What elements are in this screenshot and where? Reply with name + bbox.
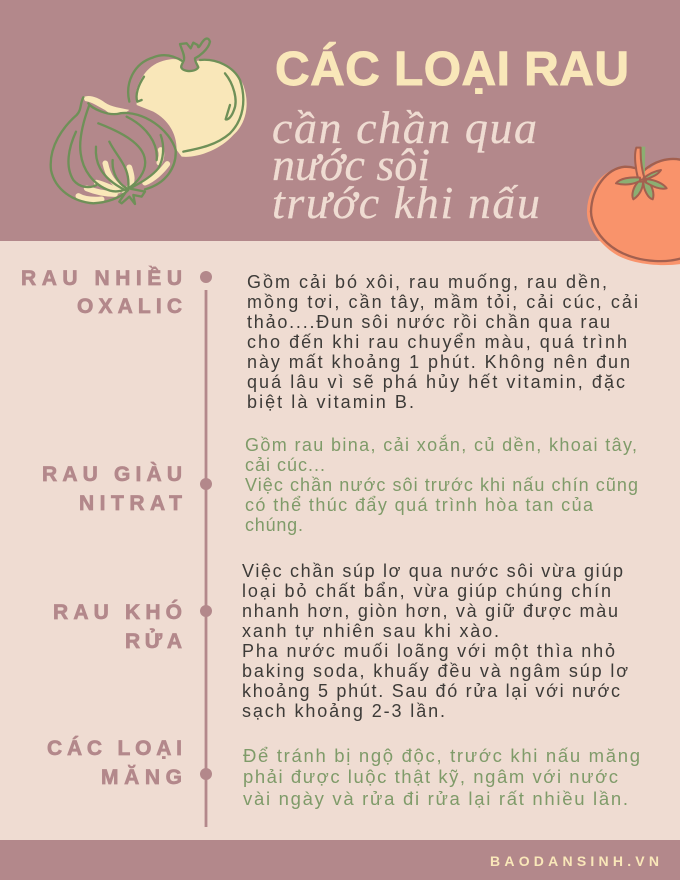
- text block: rau khó rửa: loại bỏ chất bẩn, vừa giúp chúng chín: [242, 581, 611, 601]
- icon: onions illustration: [51, 39, 247, 204]
- text block: rau khó rửa: baking soda, khuấy đều và ngâm súp lơ: [242, 661, 628, 681]
- heading: rau giàu nitrat: NITRAT: [79, 492, 182, 515]
- text block: các loại măng: vài ngày và rửa đi rửa lại rất nhiều lần.: [243, 788, 628, 809]
- text block: rau giàu nitrat: Gồm rau bina, cải xoắn, củ dền, khoai tây,: [245, 434, 637, 455]
- timeline: [200, 271, 212, 827]
- text block: rau khó rửa: khoảng 5 phút. Sau đó rửa lại với nước: [242, 681, 620, 701]
- icon: back onion: [128, 39, 247, 157]
- text block: rau giàu nitrat: Việc chần nước sôi trước khi nấu chín cũng: [245, 475, 638, 495]
- icon: tomato: [587, 147, 680, 265]
- text block: rau nhiều oxalic: cho đến khi rau chuyển màu, quá trình: [247, 332, 627, 352]
- text block: rau giàu nitrat: có thể thúc đẩy quá trình hòa tan của: [245, 495, 594, 515]
- text block: các loại măng: Để tránh bị ngộ độc, trước khi nấu măng: [243, 745, 640, 766]
- heading: các loại măng: MĂNG: [101, 766, 182, 789]
- subtitle: cần chần qua: [272, 102, 537, 153]
- title: CÁC LOẠI RAU: [275, 42, 629, 96]
- subtitle: nước sôi: [272, 139, 430, 190]
- text block: rau khó rửa: xanh tự nhiên sau khi xào.: [242, 621, 499, 641]
- footer band: [0, 840, 680, 880]
- text block: rau giàu nitrat: [245, 434, 638, 535]
- text block: rau khó rửa: [242, 561, 628, 721]
- text block: rau nhiều oxalic: biệt là vitamin B.: [247, 392, 414, 412]
- heading: rau giàu nitrat: [42, 463, 182, 515]
- text block: các loại măng: phải được luộc thật kỹ, ngâm với nước: [243, 766, 618, 787]
- text block: rau giàu nitrat: cải cúc...: [245, 455, 325, 475]
- text block: rau khó rửa: nhanh hơn, giòn hơn, và giữ được màu: [242, 601, 618, 621]
- timeline dot 1: [200, 271, 212, 283]
- heading: rau khó rửa: RỬA: [125, 629, 182, 653]
- text block: rau nhiều oxalic: Gồm cải bó xôi, rau muống, rau dền,: [247, 272, 607, 292]
- header band: [0, 0, 680, 241]
- timeline dot 4: [200, 768, 212, 780]
- text block: rau nhiều oxalic: [247, 272, 638, 412]
- heading: các loại măng: [47, 737, 182, 789]
- heading: rau nhiều oxalic: [21, 267, 182, 318]
- text block: rau khó rửa: Pha nước muối loãng với một thìa nhỏ: [242, 641, 615, 661]
- heading: rau khó rửa: [53, 600, 182, 653]
- icon: front onion: [51, 95, 176, 204]
- heading: rau khó rửa: RAU KHÓ: [53, 600, 182, 624]
- text block: rau nhiều oxalic: mồng tơi, cần tây, mầm tỏi, cải cúc, cải: [247, 292, 638, 312]
- subtitle: trước khi nấu: [272, 177, 540, 228]
- timeline dot 2: [200, 478, 212, 490]
- text block: rau khó rửa: Việc chần súp lơ qua nước sôi vừa giúp: [242, 561, 623, 581]
- text block: rau khó rửa: sạch khoảng 2-3 lần.: [242, 701, 445, 721]
- text block: rau nhiều oxalic: thảo....Đun sôi nước rồi chần qua rau: [247, 312, 610, 332]
- subtitle: [272, 102, 540, 228]
- timeline dot 3: [200, 605, 212, 617]
- text block: rau nhiều oxalic: quá lâu vì sẽ phá hủy hết vitamin, đặc: [247, 372, 625, 392]
- text block: các loại măng: [243, 745, 640, 809]
- footer source text: BAODANSINH.VN: [490, 853, 659, 869]
- text block: rau nhiều oxalic: này mất khoảng 1 phút. Không nên đun: [247, 352, 630, 372]
- heading: rau giàu nitrat: RAU GIÀU: [42, 463, 182, 486]
- heading: rau nhiều oxalic: OXALIC: [77, 295, 182, 318]
- text block: rau giàu nitrat: chúng.: [245, 515, 303, 535]
- heading: rau nhiều oxalic: RAU NHIỀU: [21, 267, 182, 290]
- heading: các loại măng: CÁC LOẠI: [47, 737, 182, 760]
